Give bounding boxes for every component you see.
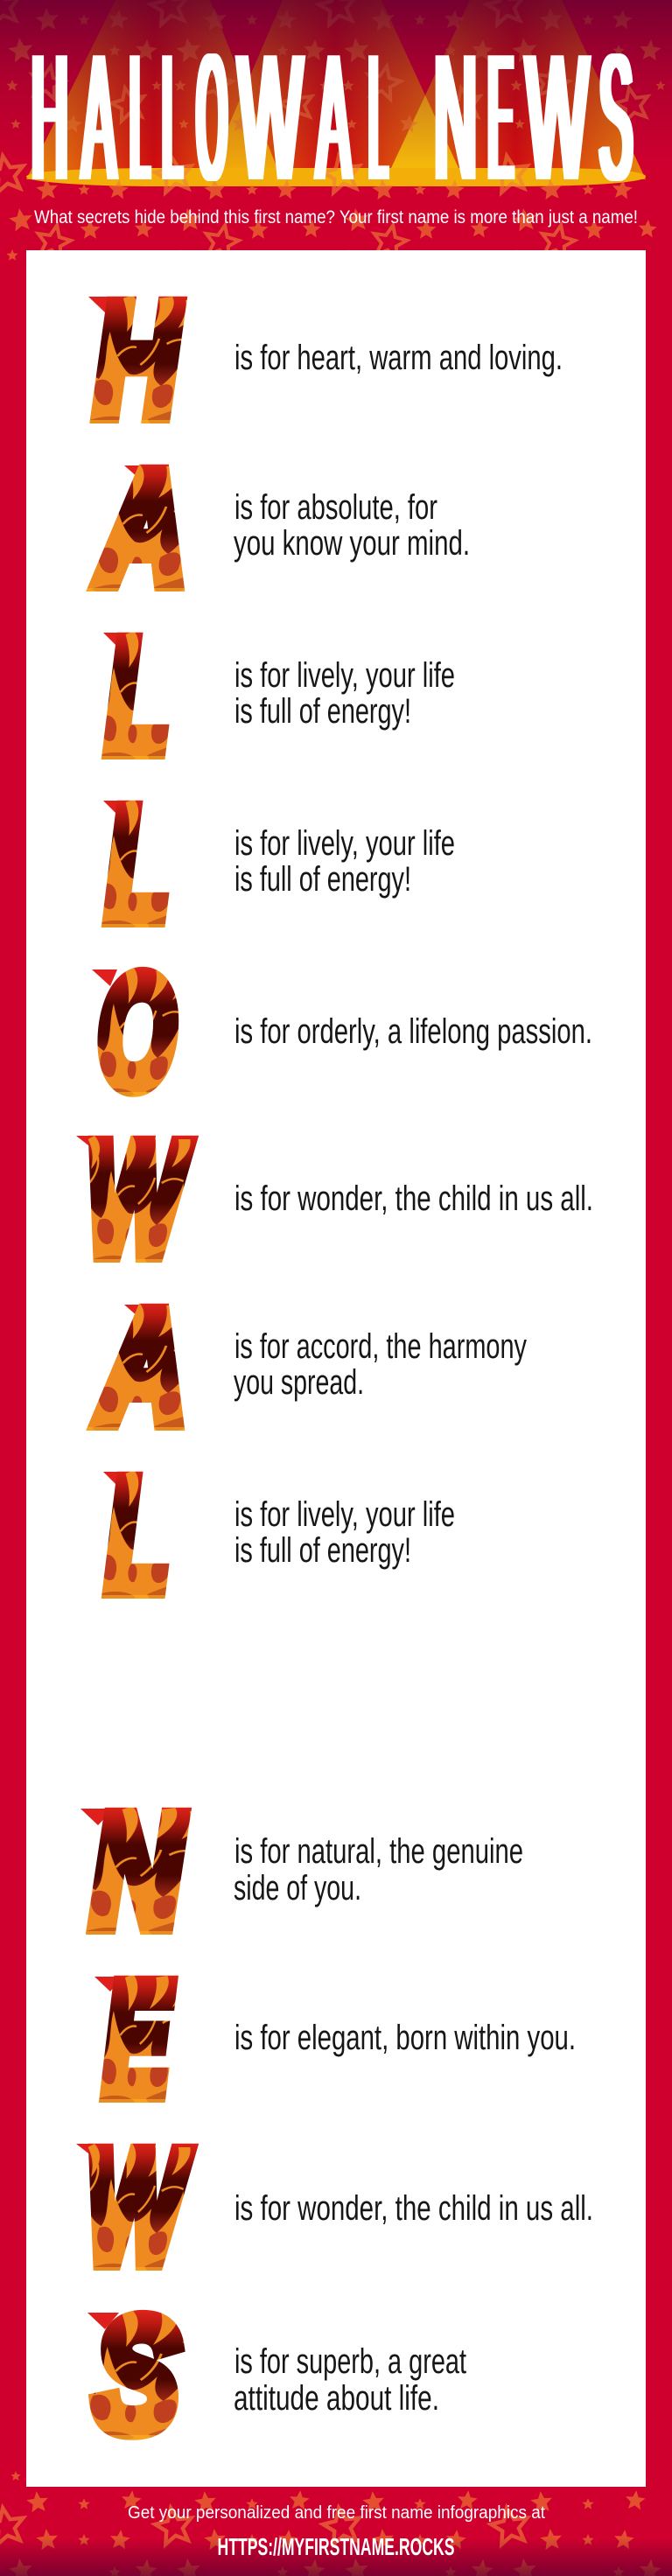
flame letter H: H bbox=[95, 270, 180, 449]
title bbox=[32, 17, 634, 218]
footer line: Get your personalized and free first name infographics at bbox=[128, 2503, 545, 2523]
title: L bbox=[163, 17, 181, 218]
footer url: HTTPS://MYFIRSTNAME.ROCKS bbox=[217, 2533, 455, 2560]
spotlights bbox=[26, 0, 646, 186]
flame letter L: L bbox=[106, 608, 169, 785]
bottom shade bbox=[0, 2538, 672, 2576]
header stars bbox=[0, 0, 666, 261]
text: side of you: side of you. bbox=[234, 1869, 361, 1908]
flame letter W: W bbox=[87, 1111, 191, 1288]
flame letter A: A bbox=[96, 439, 186, 618]
letter N row bbox=[80, 1782, 523, 1960]
top shade bbox=[0, 0, 672, 166]
text: heart: is for heart, warm and loving. bbox=[234, 339, 563, 377]
letter H row bbox=[88, 270, 563, 449]
title: E bbox=[488, 17, 513, 218]
flame letter S: S bbox=[94, 2286, 178, 2464]
letter E row bbox=[94, 1951, 576, 2129]
text: energy: is full of energy! bbox=[234, 1531, 411, 1570]
letter O row bbox=[92, 944, 592, 1122]
title: N bbox=[434, 17, 477, 218]
text: lively: is for lively, your life bbox=[234, 824, 455, 863]
letter L row 3 bbox=[103, 1447, 455, 1624]
text: superb: is for superb, a great bbox=[234, 2342, 466, 2381]
flame letter W: W bbox=[87, 2119, 191, 2296]
text: accord: is for accord, the harmony bbox=[234, 1327, 527, 1366]
title: A bbox=[317, 17, 350, 218]
letter A row 2 bbox=[96, 1278, 527, 1457]
flame letter O: O bbox=[98, 944, 175, 1122]
title: L bbox=[369, 17, 387, 218]
title: S bbox=[599, 17, 633, 218]
letter S row bbox=[88, 2286, 466, 2464]
letter W row bbox=[76, 1111, 593, 1288]
text: lively: is for lively, your life bbox=[234, 656, 455, 695]
text: you spread: you spread. bbox=[234, 1363, 364, 1402]
title: W bbox=[526, 17, 589, 218]
letter A row bbox=[96, 439, 470, 618]
title: L bbox=[130, 17, 150, 218]
text: absolute: is for absolute, for bbox=[234, 488, 438, 527]
letter L row 2 bbox=[103, 776, 455, 953]
flame letter N: N bbox=[92, 1782, 184, 1960]
text: attitude: attitude about life. bbox=[234, 2379, 439, 2418]
letter L row 1 bbox=[103, 608, 455, 785]
text: know your mind: you know your mind. bbox=[234, 524, 470, 563]
letter W row 2 bbox=[76, 2119, 593, 2296]
flame letter E: E bbox=[103, 1951, 172, 2129]
flame letter L: L bbox=[106, 776, 169, 953]
flame letter L: L bbox=[106, 1447, 169, 1624]
flame letter A: A bbox=[96, 1278, 186, 1457]
title: W bbox=[238, 17, 303, 218]
title: H bbox=[32, 17, 68, 218]
title: A bbox=[82, 17, 116, 218]
text: energy: is full of energy! bbox=[234, 692, 411, 731]
title: O bbox=[197, 17, 227, 218]
text: natural: is for natural, the genuine bbox=[234, 1832, 523, 1871]
text: energy: is full of energy! bbox=[234, 860, 411, 899]
footer stars bbox=[0, 2471, 662, 2576]
text: lively: is for lively, your life bbox=[234, 1495, 455, 1534]
